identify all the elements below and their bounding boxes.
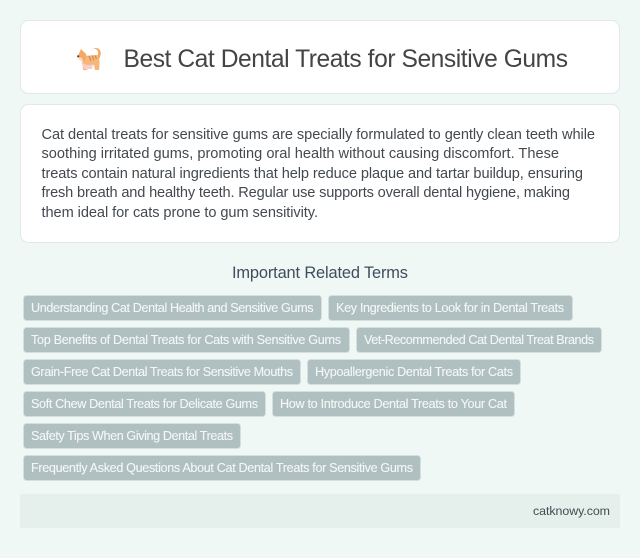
description text [42,127,595,221]
footer [20,494,620,528]
tag: faq [24,456,420,480]
title: Best Cat Dental Treats for Sensitive Gums [124,46,568,73]
tag: grain-free [24,360,300,384]
tag: hypoallergenic [308,360,520,384]
tag: hypoallergenic: Hypoallergenic Dental Treats for Cats [315,365,513,379]
tag: how to introduce [272,392,514,416]
tag: soft chew: Soft Chew Dental Treats for Delicate Gums [31,397,258,411]
tag: key ingredients: Key Ingredients to Look for in Dental Treats [336,301,564,315]
tag: grain-free: Grain-Free Cat Dental Treats for Sensitive Mouths [31,365,293,379]
description text: fresh breath and healthy teeth. Regular use supports overall dental hygiene, making [42,185,570,201]
tags [24,296,602,480]
tag: vet-recommended [356,328,602,352]
tag: how to introduce: How to Introduce Dental Treats to Your Cat [280,397,508,411]
tag: soft chew [24,392,266,416]
tag: vet-recommended: Vet-Recommended Cat Dental Treat Brands [364,333,594,347]
panel: description [20,104,620,242]
tag: top benefits: Top Benefits of Dental Treats for Cats with Sensitive Gums [31,333,341,347]
description text: soothing irritated gums, promoting oral health without causing discomfort. These [42,146,559,162]
header panel [20,20,620,94]
tag: faq: Frequently Asked Questions About Cat Dental Treats for Sensitive Gums [31,461,413,475]
heading: important related terms: Important Related Terms [232,264,408,282]
tag: safety tips [24,424,240,448]
description text: treats contain natural ingredients that help reduce plaque and tartar buildup, ensuring [42,166,583,182]
icon: orange cat [77,48,101,70]
footer source text: catknowy.com [533,504,610,518]
tag: understanding: Understanding Cat Dental Health and Sensitive Gums [31,301,314,315]
tag: safety tips: Safety Tips When Giving Dental Treats [31,429,233,443]
tag: understanding [24,296,322,320]
description text: Cat dental treats for sensitive gums are specially formulated to gently clean teeth while [42,127,595,143]
description text: them ideal for cats prone to gum sensitivity. [42,205,318,221]
tag: top benefits [24,328,350,352]
tag: key ingredients [328,296,572,320]
